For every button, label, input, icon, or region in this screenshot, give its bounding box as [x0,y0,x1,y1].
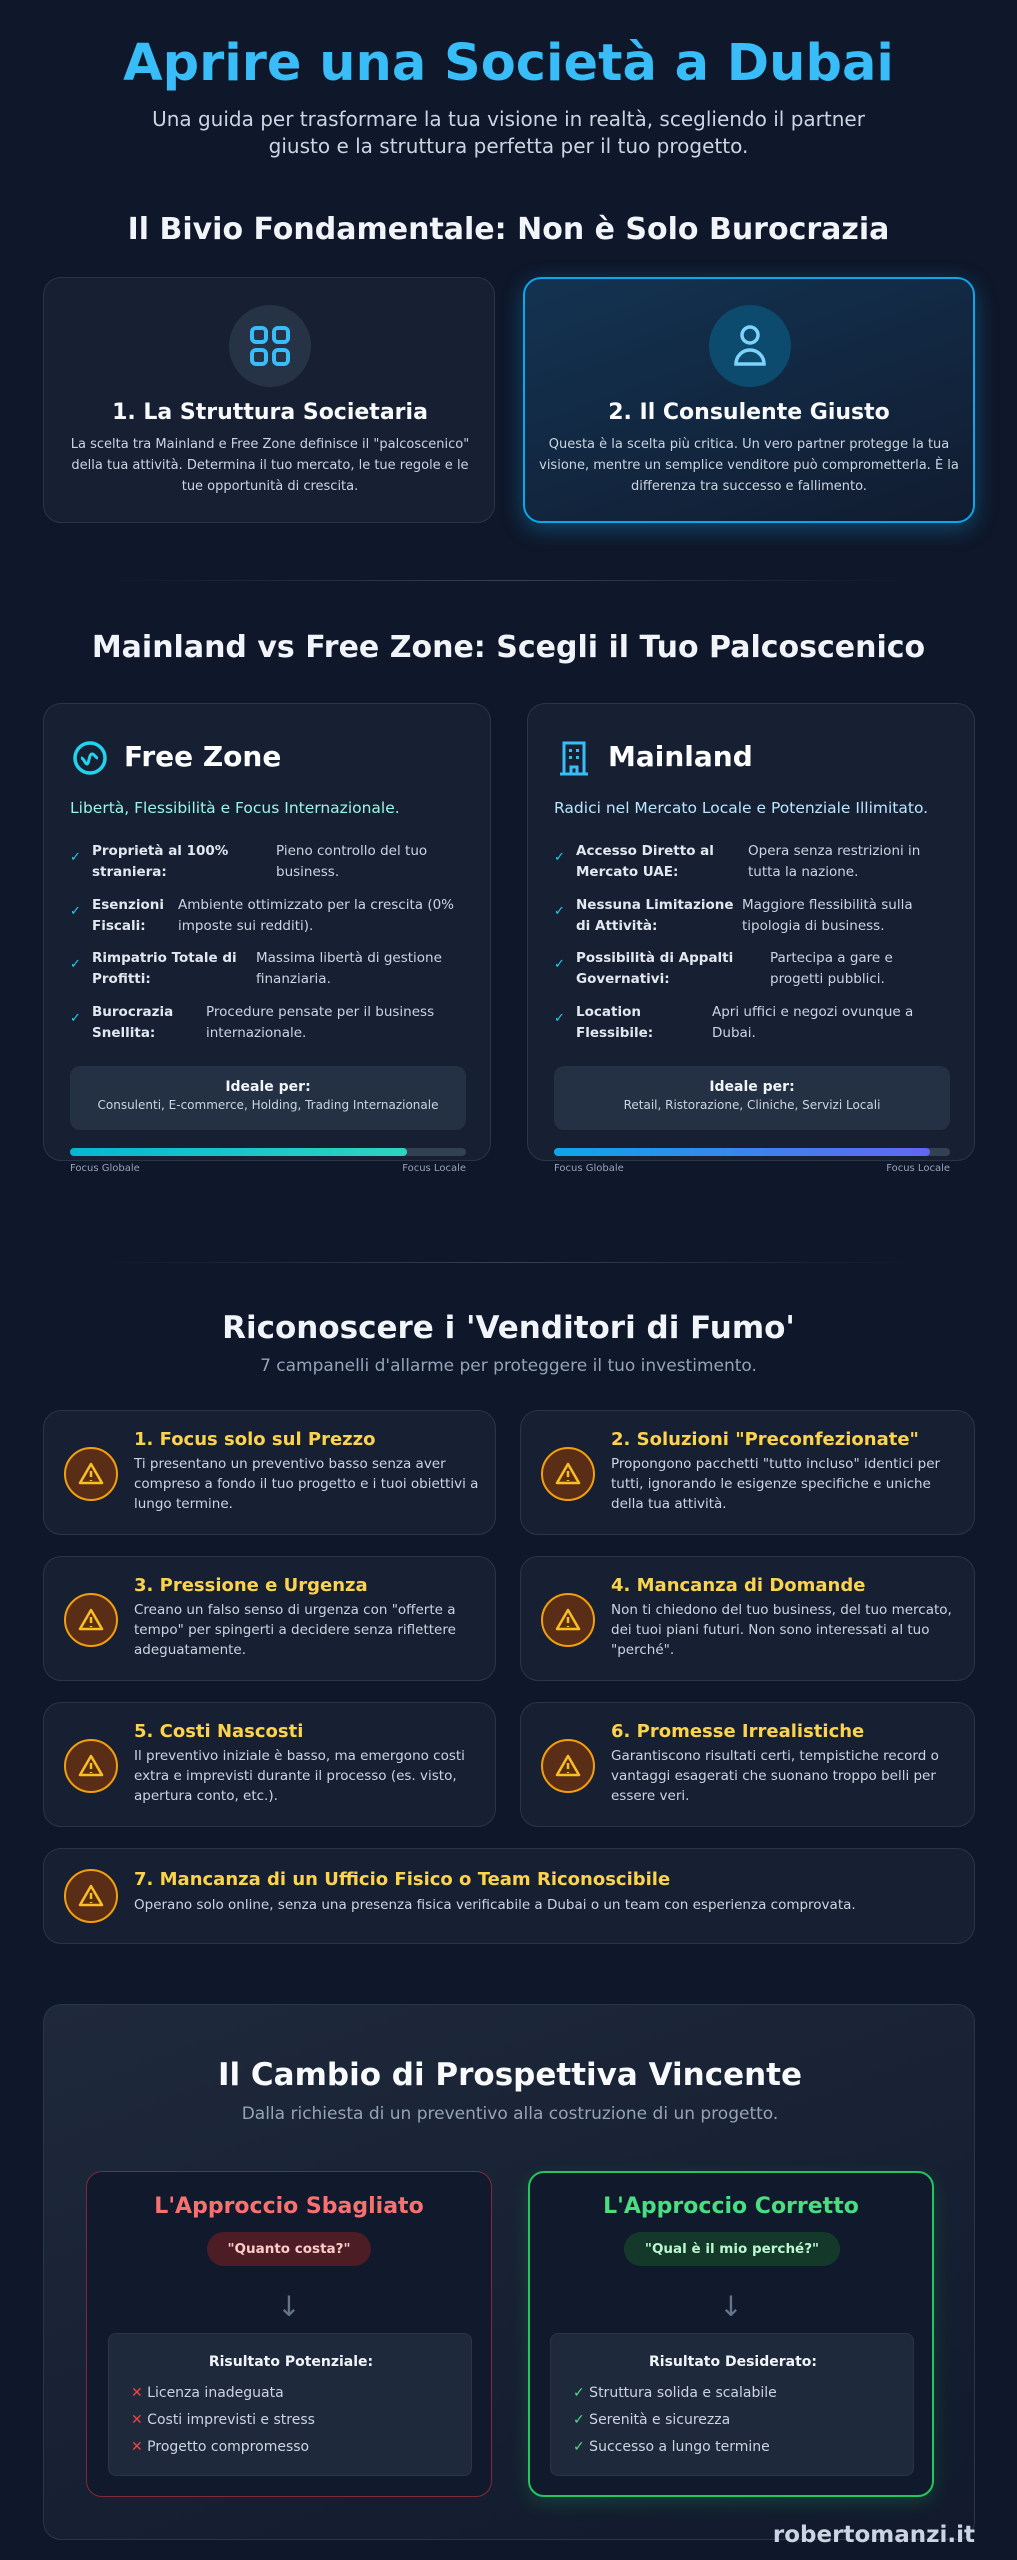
list: tipologia di business. [742,918,885,934]
ideal box [70,1066,466,1130]
box title: L'Approccio Corretto [603,2194,859,2219]
list: Pieno controllo del tuo [276,843,427,859]
warning 3: 3. Pressione e Urgenza [134,1575,368,1596]
arrow: ↓ [719,2290,743,2323]
warning 2: Propongono pacchetti "tutto incluso" identici per tutti, ignorando le esigenze specifiche e uniche della tua attività. [611,1456,940,1512]
warning 2 [520,1410,975,1535]
footer brand: robertomanzi.it [773,2522,975,2548]
card text: La scelta tra Mainland e Free Zone definisce il "palcoscenico" della tua attività. Determina il tuo mercato, le tue regole e le tue opportunità di crescita. [71,437,469,494]
list: di Attività: [576,918,657,934]
warning 5: Il preventivo iniziale è basso, ma emergono costi extra e imprevisti durante il processo (es. visto, apertura conto, etc.). [134,1748,465,1804]
panel: free zone [43,703,491,1161]
list: Procedure pensate per il business [206,1004,434,1020]
list: progetti pubblici. [770,971,885,987]
result box: ✓ Serenità e sicurezza [573,2412,730,2428]
list: ✓ [70,850,81,865]
list: finanziaria. [256,971,331,987]
list: Location [576,1004,641,1020]
warning 2: 2. Soluzioni "Preconfezionate" [611,1429,919,1450]
box title: L'Approccio Sbagliato [154,2194,424,2219]
result box: Risultato Potenziale: [209,2354,373,2370]
icon: building [560,742,588,776]
list: Opera senza restrizioni in [748,843,920,859]
ideal box: Consulenti, E-commerce, Holding, Trading Internazionale [98,1098,438,1112]
result box [550,2333,914,2476]
panel: mainland [527,703,975,1161]
list: Rimpatrio Totale di [92,950,237,966]
heading: mainland vs free zone: Mainland vs Free Zone: Scegli il Tuo Palcoscenico [92,630,925,665]
card title: 2. Il Consulente Giusto [608,400,890,425]
title: Aprire una Società a Dubai [123,34,894,93]
panel heading: Il Cambio di Prospettiva Vincente [218,2057,802,2093]
heading: venditori di fumo: Riconoscere i 'Venditori di Fumo' [222,1310,795,1346]
pill [207,2232,371,2266]
list: Burocrazia [92,1004,173,1020]
text: Focus Locale [402,1163,466,1174]
list: Proprietà al 100% [92,843,228,859]
list: ✓ [70,957,81,972]
list: Apri uffici e negozi ovunque a [712,1004,913,1020]
warning cards [43,1410,975,1944]
warning 6: Garantiscono risultati certi, tempistiche record o vantaggi esagerati che suonano troppo belli per essere veri. [611,1748,939,1804]
warning 7: Operano solo online, senza una presenza fisica verificabile a Dubai o un team con esperienza comprovata. [134,1897,856,1913]
arrow: ↓ [277,2290,301,2323]
panel subtitle: Libertà, Flessibilità e Focus Internazionale. [70,799,400,817]
list: ✓ [70,904,81,919]
panel subtitle: Radici nel Mercato Locale e Potenziale Illimitato. [554,799,928,817]
warning 1: Ti presentano un preventivo basso senza aver compreso a fondo il tuo progetto e i tuoi obiettivi a lungo termine. [134,1456,478,1512]
warning 6: 6. Promesse Irrealistiche [611,1721,864,1742]
warning 4: 4. Mancanza di Domande [611,1575,865,1596]
pill [624,2232,840,2266]
result box: ✓ Struttura solida e scalabile [573,2385,777,2401]
warning 7 [43,1848,975,1944]
text: Focus Globale [70,1163,140,1174]
list: Profitti: [92,971,151,987]
ideal box: Ideale per: [709,1079,795,1095]
card: struttura societaria [43,277,495,523]
ideal box: Retail, Ristorazione, Cliniche, Servizi Locali [624,1098,880,1112]
box: approccio corretto [528,2171,934,2497]
list: Maggiore flessibilità sulla [742,897,913,913]
warning 4 [520,1556,975,1681]
list: Governativi: [576,971,670,987]
subheading: 7 campanelli d'allarme per proteggere il tuo investimento. [260,1356,757,1376]
ideal box [554,1066,950,1130]
panel subtitle: Dalla richiesta di un preventivo alla costruzione di un progetto. [242,2104,778,2124]
list: Esenzioni [92,897,164,913]
list: Partecipa a gare e [770,950,893,966]
result box: ✕ Costi imprevisti e stress [131,2412,315,2428]
card: consulente giusto [523,277,975,523]
bar: focus [554,1148,950,1156]
pill: "Quanto costa?" [227,2241,350,2257]
list: Dubai. [712,1025,756,1041]
list: Possibilità di Appalti [576,950,733,966]
subtitle: Una guida per trasformare la tua visione in realtà, scegliendo il partner giusto e la struttura perfetta per il tuo progetto. [152,107,865,158]
heading: bivio: Il Bivio Fondamentale: Non è Solo Burocrazia [128,212,889,247]
bar: focus [70,1148,466,1156]
list: ✓ [554,904,565,919]
warning 3: Creano un falso senso di urgenza con "offerte a tempo" per spingerti a decidere senza riflettere adeguatamente. [134,1602,456,1658]
list: ✓ [554,957,565,972]
list: Fiscali: [92,918,146,934]
list: Nessuna Limitazione [576,897,734,913]
list [554,843,920,1041]
card text: Questa è la scelta più critica. Un vero partner protegge la tua visione, mentre un semplice venditore può comprometterla. È la differenza tra successo e fallimento. [539,437,959,494]
panel title: Mainland [608,740,753,773]
warning 5: 5. Costi Nascosti [134,1721,303,1742]
list: imposte sui redditi). [178,918,313,934]
list: Ambiente ottimizzato per la crescita (0% [178,897,454,913]
list: straniera: [92,864,167,880]
icon: person [709,305,791,387]
list: internazionale. [206,1025,306,1041]
result box: ✕ Licenza inadeguata [131,2385,284,2401]
list: tutta la nazione. [748,864,858,880]
warning 7: 7. Mancanza di un Ufficio Fisico o Team Riconoscibile [134,1869,670,1890]
icon: free zone [73,741,107,775]
warning 4: Non ti chiedono del tuo business, del tuo mercato, dei tuoi piani futuri. Non sono interessati al tuo "perché". [611,1602,952,1658]
warning 1 [43,1410,496,1535]
icon: grid [229,305,311,387]
panel: cambio di prospettiva [43,2004,975,2540]
box: approccio sbagliato [86,2171,492,2497]
text: Focus Locale [886,1163,950,1174]
list: ✓ [70,1011,81,1026]
list: ✓ [554,850,565,865]
list: Massima libertà di gestione [256,950,442,966]
warning 6 [520,1702,975,1827]
warning 1: 1. Focus solo sul Prezzo [134,1429,375,1450]
result box: Risultato Desiderato: [649,2354,817,2370]
result box [108,2333,472,2476]
list: Mercato UAE: [576,864,678,880]
text: Focus Globale [554,1163,624,1174]
card title: 1. La Struttura Societaria [112,400,428,425]
list: ✓ [554,1011,565,1026]
list: Accesso Diretto al [576,843,714,859]
warning 3 [43,1556,496,1681]
list: business. [276,864,339,880]
panel title: Free Zone [124,740,281,773]
ideal box: Ideale per: [225,1079,311,1095]
result box: ✓ Successo a lungo termine [573,2439,770,2455]
list: Flessibile: [576,1025,653,1041]
result box: ✕ Progetto compromesso [131,2439,309,2455]
pill: "Qual è il mio perché?" [645,2241,819,2257]
list: Snellita: [92,1025,155,1041]
warning 5 [43,1702,496,1827]
list [70,843,454,1041]
